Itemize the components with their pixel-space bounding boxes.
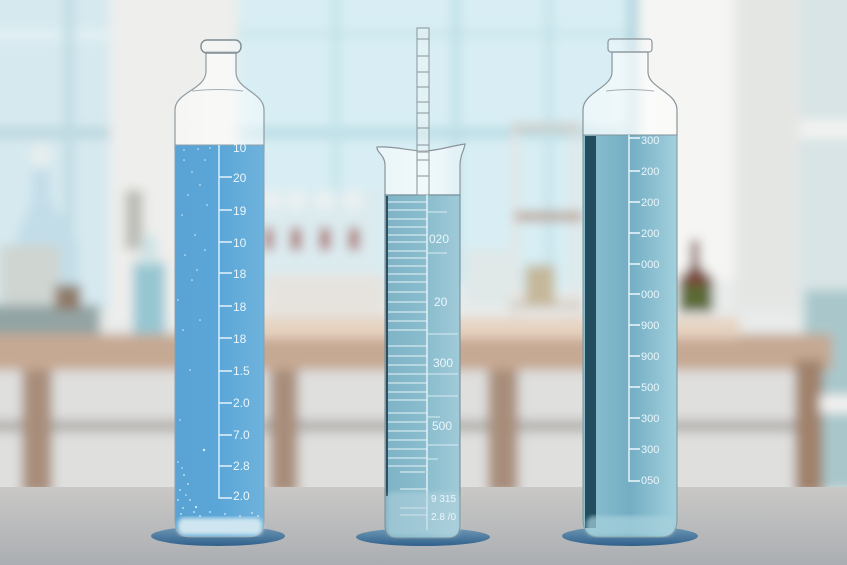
scale labels: 20 bbox=[233, 171, 247, 185]
shelf bottles row bbox=[262, 190, 382, 280]
base disc bbox=[151, 526, 285, 546]
scale labels: 300 bbox=[641, 135, 659, 147]
scale labels: 020 bbox=[429, 232, 449, 246]
rack bbox=[512, 120, 518, 320]
scale labels: 7.0 bbox=[233, 428, 250, 442]
scale labels: 19 bbox=[233, 204, 247, 218]
scale labels: 2.0 bbox=[233, 489, 250, 503]
hydrometer stick bbox=[417, 28, 429, 195]
base disc bbox=[356, 528, 490, 546]
scale labels: 500 bbox=[641, 382, 659, 394]
cabinets bbox=[0, 370, 820, 495]
cylinder 2: graduated beaker bbox=[356, 28, 490, 546]
scale labels: 20 bbox=[434, 295, 448, 309]
right graduations bbox=[427, 212, 458, 459]
glass body bbox=[175, 40, 264, 150]
left graduations bbox=[388, 202, 427, 515]
scale labels: 10 bbox=[233, 236, 247, 250]
left bottles bbox=[16, 170, 78, 300]
scale labels: 2.0 bbox=[233, 396, 250, 410]
centre window bbox=[238, 0, 638, 290]
scale labels: 2.8 /0 bbox=[431, 512, 456, 523]
scale labels bbox=[641, 135, 659, 487]
scale labels bbox=[233, 141, 250, 503]
scale bbox=[629, 135, 640, 481]
bottom meniscus bbox=[586, 516, 674, 536]
sediment bbox=[387, 492, 459, 536]
base disc bbox=[562, 526, 698, 546]
scale bbox=[219, 145, 232, 498]
scale labels: 900 bbox=[641, 351, 659, 363]
brown bottle bbox=[679, 240, 713, 312]
scale labels: 000 bbox=[641, 259, 659, 271]
glass body bbox=[583, 39, 677, 137]
scale labels: 18 bbox=[233, 267, 247, 281]
scale labels: 300 bbox=[641, 444, 659, 456]
scale labels bbox=[429, 232, 456, 523]
scale labels: 9 315 bbox=[431, 494, 456, 505]
scale labels: 200 bbox=[641, 166, 659, 178]
cylinder 3: clear teal liquid bbox=[562, 39, 698, 546]
scale labels: 200 bbox=[641, 197, 659, 209]
scale labels: 050 bbox=[641, 475, 659, 487]
liquid bbox=[583, 135, 677, 537]
white pillar bbox=[110, 0, 235, 320]
suspended particles bbox=[177, 147, 259, 517]
cylinder 1: granular blue liquid bbox=[151, 40, 285, 546]
dark strip bbox=[585, 136, 596, 528]
scale labels: 500 bbox=[432, 419, 452, 433]
scale labels: 200 bbox=[641, 228, 659, 240]
table surface bbox=[0, 487, 847, 565]
scale labels: 10 bbox=[233, 141, 247, 155]
scale labels: 000 bbox=[641, 289, 659, 301]
scale labels: 2.8 bbox=[233, 459, 250, 473]
left window bbox=[0, 0, 110, 310]
scale labels: 18 bbox=[233, 300, 247, 314]
liquid bbox=[175, 145, 264, 537]
scale labels: 1.5 bbox=[233, 364, 250, 378]
centre scale bbox=[426, 195, 428, 530]
counter top bbox=[0, 334, 832, 370]
right wall bbox=[640, 0, 740, 280]
scale labels: 900 bbox=[641, 320, 659, 332]
scale labels: 300 bbox=[641, 413, 659, 425]
sediment bbox=[178, 518, 262, 535]
glass body bbox=[377, 144, 465, 195]
scale labels: 18 bbox=[233, 332, 247, 346]
scale labels: 300 bbox=[433, 356, 453, 370]
liquid bbox=[385, 195, 460, 538]
